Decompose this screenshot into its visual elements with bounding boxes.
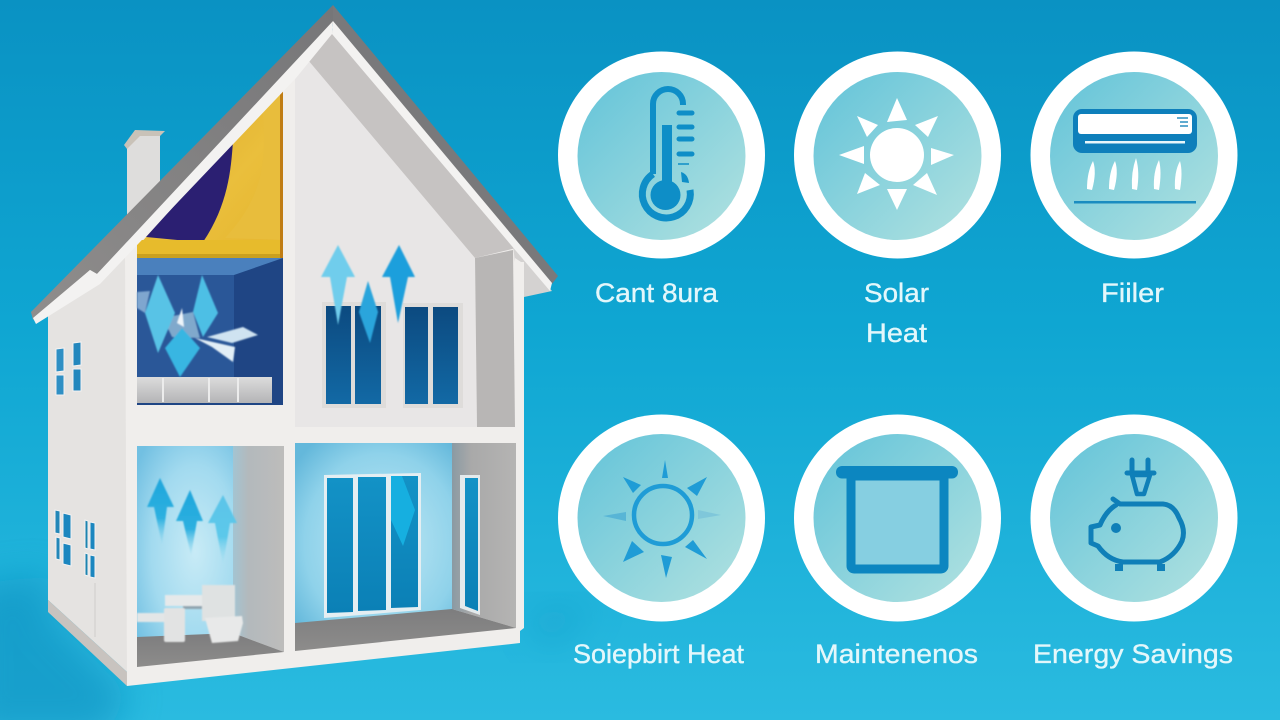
upper right windows xyxy=(322,302,463,408)
roof xyxy=(31,5,558,324)
icon: outlined sun xyxy=(603,460,721,578)
label: filter: Fiiler xyxy=(1101,278,1164,308)
label: solar heat: Heat xyxy=(866,318,928,348)
icon card: maintenance xyxy=(794,414,1001,622)
ground shadow xyxy=(0,575,600,720)
glass door xyxy=(324,473,421,618)
upper airflow arrows xyxy=(321,245,415,343)
icon card: energy savings xyxy=(1030,414,1238,622)
bed xyxy=(137,377,272,403)
icon: white sun xyxy=(839,98,954,210)
icon card: thermometer xyxy=(558,52,765,258)
icon: square frame xyxy=(836,466,958,569)
side windows xyxy=(55,342,95,578)
narrow side window xyxy=(460,475,480,615)
icon card: filter xyxy=(1030,52,1238,258)
side wall xyxy=(48,235,127,686)
icon card: sun outline xyxy=(558,414,765,622)
furniture xyxy=(137,585,243,643)
icon: plug and piggy bank xyxy=(1091,460,1183,571)
lower right room xyxy=(295,443,516,651)
icon card: solar heat xyxy=(794,52,1001,258)
icon: air conditioner xyxy=(1073,109,1197,204)
lower left room xyxy=(137,446,284,667)
airflow arrows and paper xyxy=(137,275,258,377)
attic insulation xyxy=(137,88,283,258)
upper left room xyxy=(137,258,283,405)
label: solar heat: Solar xyxy=(864,278,929,308)
label: maintenance: Maintenenos xyxy=(815,639,978,669)
icon: thermometer xyxy=(642,89,692,218)
label: solar heat xyxy=(864,278,929,348)
chimney xyxy=(124,130,165,215)
label: thermometer: Cant 8ura xyxy=(595,278,719,308)
upper right gable wall xyxy=(295,30,552,428)
label: sun outline: Soiepbirt Heat xyxy=(573,639,744,669)
lower airflow arrows xyxy=(147,478,237,565)
label: energy savings: Energy Savings xyxy=(1033,639,1233,669)
house cutaway xyxy=(31,5,558,686)
front wall xyxy=(125,50,524,686)
